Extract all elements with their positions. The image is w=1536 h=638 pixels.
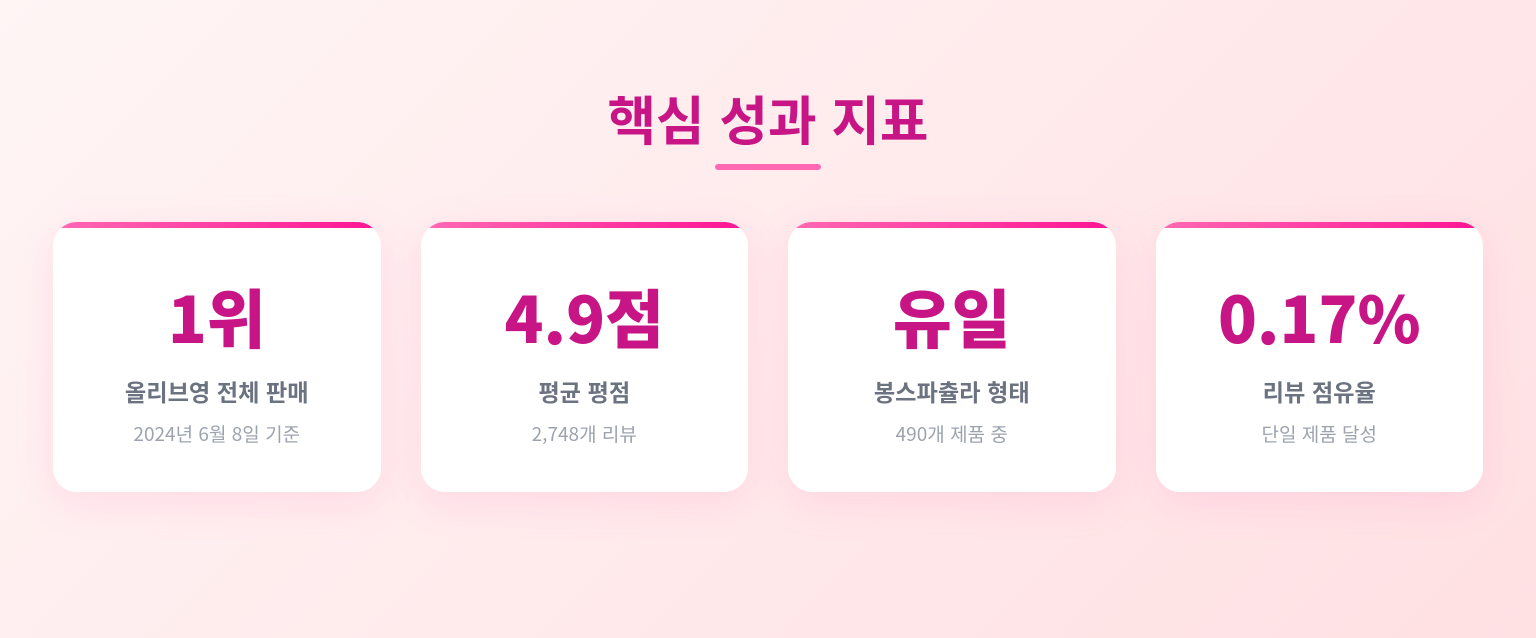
metric label: ranking: 올리브영 전체 판매 <box>125 374 309 408</box>
title: 핵심 성과 지표 <box>607 80 928 156</box>
metric label: rating: 평균 평점 <box>538 374 630 408</box>
metric note: uniqueness: 490개 제품 중 <box>896 420 1008 447</box>
metric value: rating: 4.9점 <box>505 270 664 362</box>
metric label: uniqueness: 봉스파츌라 형태 <box>874 374 1030 408</box>
metric value: uniqueness: 유일 <box>893 270 1011 362</box>
metric note: rating: 2,748개 리뷰 <box>532 420 637 447</box>
panel: ranking card <box>53 222 380 492</box>
metric note: review share: 단일 제품 달성 <box>1261 420 1377 447</box>
metric note: ranking: 2024년 6월 8일 기준 <box>133 420 300 447</box>
panel: rating card <box>420 222 748 492</box>
panel: review share card <box>1156 222 1483 492</box>
metric value: review share: 0.17% <box>1218 270 1421 362</box>
title underline <box>715 164 821 170</box>
metric value: ranking: 1위 <box>168 270 266 362</box>
metric label: review share: 리뷰 점유율 <box>1263 374 1376 408</box>
panel: uniqueness card <box>788 222 1116 492</box>
